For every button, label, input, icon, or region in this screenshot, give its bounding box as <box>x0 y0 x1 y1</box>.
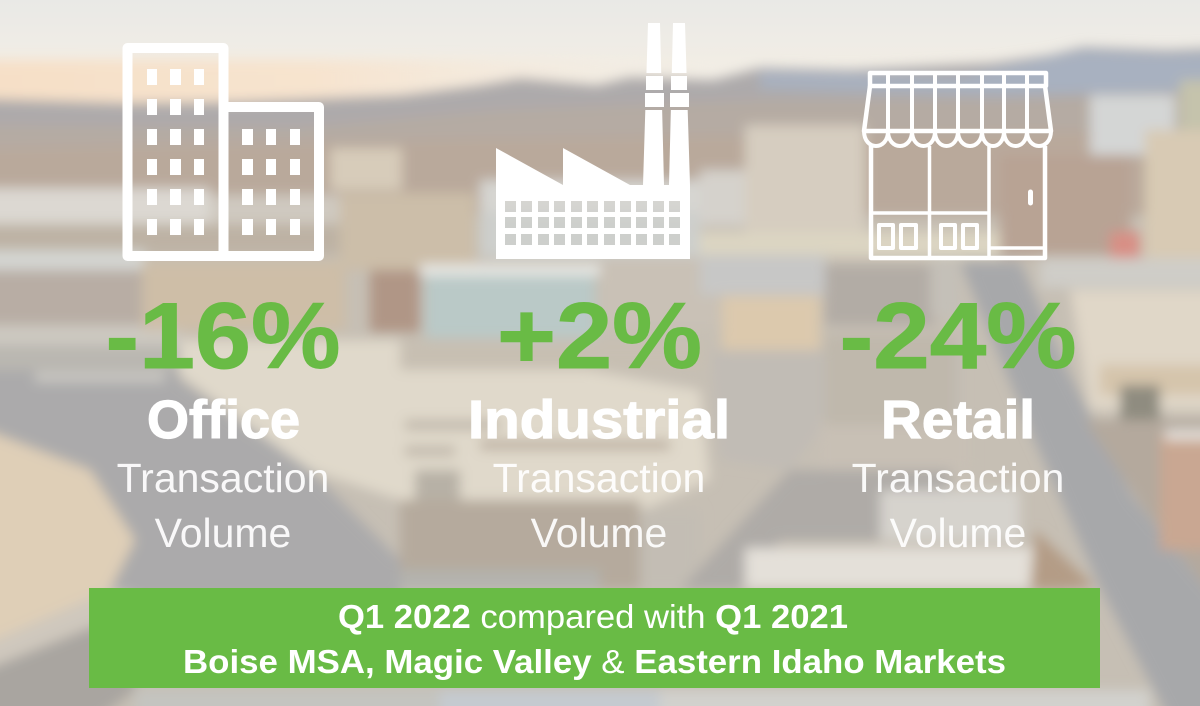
icon: office buildings <box>128 48 319 256</box>
description: industrial: Volume <box>531 510 667 556</box>
description: office: Volume <box>155 510 291 556</box>
banner: comparison period and markets <box>89 588 1100 688</box>
description: retail: Transaction <box>852 455 1064 501</box>
icon: factory <box>496 23 690 259</box>
percentage: retail: -24% <box>840 283 1076 388</box>
label: retail: Retail <box>881 390 1035 450</box>
label: industrial: Industrial <box>468 390 730 450</box>
stat: office <box>106 283 340 556</box>
description: industrial: Transaction <box>493 455 705 501</box>
description: office: Transaction <box>117 455 329 501</box>
banner: comparison period and markets: Q1 2022 compared with Q1 2021 <box>338 598 848 635</box>
icon: retail storefront <box>864 73 1051 258</box>
label: office: Office <box>147 390 300 450</box>
stat: industrial <box>468 283 730 556</box>
description: retail: Volume <box>890 510 1026 556</box>
stat: retail <box>840 283 1076 556</box>
percentage: industrial: +2% <box>497 283 702 388</box>
percentage: office: -16% <box>106 283 340 388</box>
banner: comparison period and markets: Boise MSA, Magic Valley & Eastern Idaho Markets <box>183 643 1006 680</box>
